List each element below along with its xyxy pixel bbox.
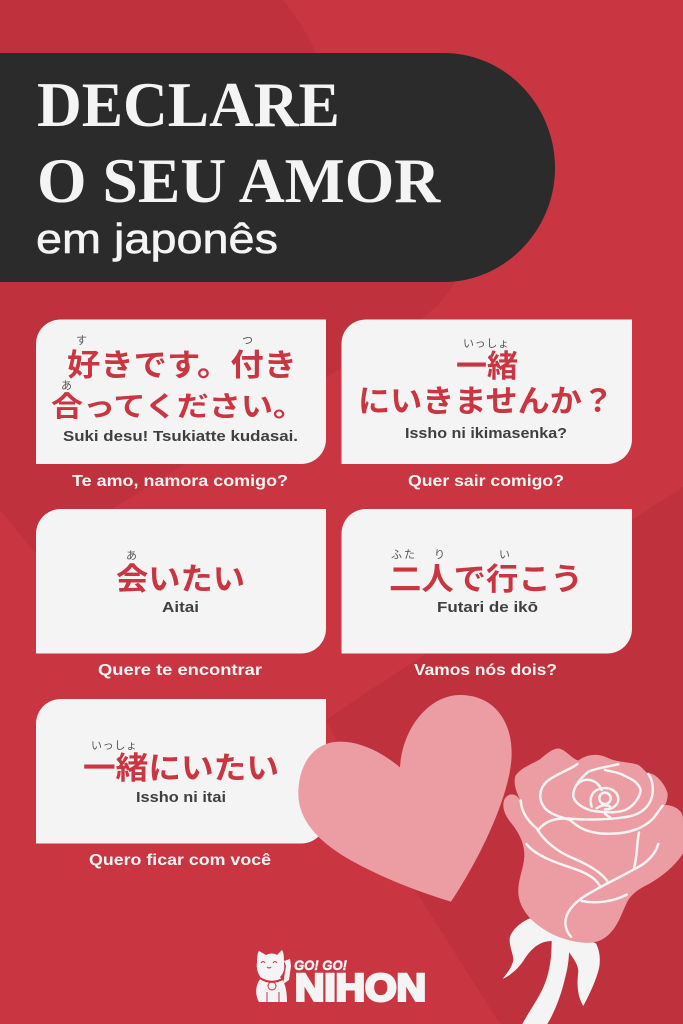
subtitle: em japonês	[36, 215, 278, 262]
panel: futari	[342, 509, 632, 654]
logo: go go nihon	[256, 950, 426, 1010]
petal lines	[521, 764, 663, 937]
furigana: いっしょ	[91, 739, 137, 752]
icon: pink heart	[298, 695, 512, 902]
background heart: top left	[0, 0, 460, 555]
japanese phrase: 二人で行こう	[389, 562, 583, 597]
icon: lucky cat	[256, 950, 291, 1002]
panel: quer sair	[342, 320, 632, 464]
caption: futari: Vamos nós dois?	[414, 662, 557, 679]
panel: issho ni itai	[36, 699, 326, 844]
romaji: Futari de ikō	[437, 600, 538, 616]
japanese phrase: にいきませんか？	[358, 384, 614, 419]
romaji: Suki desu! Tsukiatte kudasai.	[63, 429, 298, 445]
furigana: ふた	[391, 548, 415, 561]
caption: quer sair: Quer sair comigo?	[408, 473, 564, 490]
icon: rose	[503, 749, 683, 1024]
title: declare: DECLARE	[37, 69, 340, 140]
flower	[503, 749, 683, 943]
japanese phrase: 合ってください。	[51, 391, 305, 422]
furigana	[61, 334, 253, 392]
japanese phrase	[358, 349, 614, 419]
caption: te amo: Te amo, namora comigo?	[72, 473, 288, 490]
japanese phrase: 一緒	[456, 349, 518, 384]
japanese phrase: 一緒にいたい	[83, 751, 279, 786]
japanese phrase	[51, 348, 305, 422]
furigana: つ	[242, 335, 253, 347]
romaji: Issho ni itai	[136, 790, 226, 806]
furigana: す	[76, 334, 87, 347]
title banner	[0, 53, 555, 282]
stem and leaves	[503, 918, 600, 1024]
romaji: Aitai	[162, 600, 199, 616]
japanese phrase: 好きです。付き	[67, 348, 297, 383]
logo text: go go: GO! GO!	[294, 957, 347, 973]
furigana: あ	[126, 549, 137, 562]
furigana: い	[499, 549, 510, 561]
furigana	[391, 548, 510, 561]
caption: aitai: Quere te encontrar	[98, 662, 262, 679]
romaji: Issho ni ikimasenka?	[405, 426, 567, 442]
furigana: り	[434, 548, 445, 561]
japanese phrase: 会いたい	[116, 562, 245, 597]
logo text: nihon: NIHON	[295, 968, 426, 1010]
furigana: いっしょ	[463, 337, 509, 350]
panel: aitai	[36, 509, 326, 654]
furigana: あ	[61, 379, 72, 392]
title: o seu amor: O SEU AMOR	[37, 145, 441, 216]
background heart: bottom right	[326, 487, 683, 1024]
panel: te amo	[36, 320, 326, 464]
caption: issho ni itai: Quero ficar com você	[89, 852, 271, 869]
